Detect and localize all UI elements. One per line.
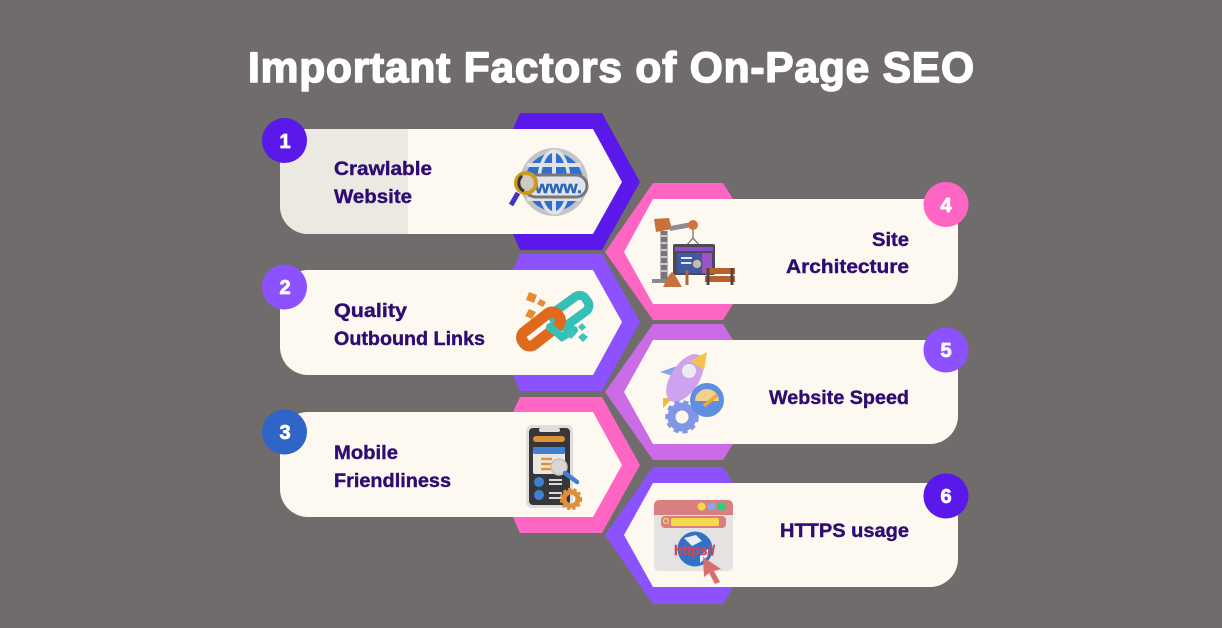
number badge 3: 3 <box>279 422 291 444</box>
label: Mobile Friendliness: Friendliness <box>334 470 451 492</box>
number badge 5: 5 <box>940 340 952 362</box>
panel: 2 Quality Outbound Links <box>262 254 640 391</box>
panel: 1 Crawlable Website <box>262 113 640 250</box>
number badge 1: 1 <box>279 131 291 153</box>
number badge 2: 2 <box>279 277 291 299</box>
label: Quality Outbound Links <box>334 300 485 350</box>
number badge 1 <box>262 118 307 163</box>
title: Important Factors of On-Page SEO <box>248 45 974 92</box>
number badge 6: 6 <box>940 486 952 508</box>
number badge 5 <box>924 328 968 372</box>
label: Crawlable Website: Crawlable <box>334 158 432 180</box>
number badge 3 <box>262 410 307 454</box>
icon: www globe with magnifier: www. <box>534 178 582 197</box>
label: Crawlable Website: Website <box>334 186 412 208</box>
icon: chain link <box>519 292 592 349</box>
icon: browser window with https globe <box>654 500 733 584</box>
label: Crawlable Website <box>334 158 432 208</box>
label: Quality Outbound Links: Quality <box>334 300 407 322</box>
label: Website Speed: Website Speed <box>769 387 909 409</box>
icon: phone with gear <box>526 425 581 509</box>
number badge 4: 4 <box>940 195 952 217</box>
label: HTTPS usage: HTTPS usage <box>780 520 909 542</box>
icon: construction crane and web page <box>652 218 735 287</box>
number badge 6 <box>924 474 968 518</box>
panel: 4 Site Architecture <box>605 182 968 320</box>
panel: 5 Website Speed <box>605 324 968 460</box>
label: Site Architecture: Site <box>872 229 909 251</box>
icon: browser window with https globe: https// <box>674 542 715 558</box>
icon: www globe with magnifier <box>511 148 588 216</box>
number badge 2 <box>262 264 307 310</box>
label: Site Architecture <box>786 229 909 278</box>
label: Quality Outbound Links: Outbound Links <box>334 328 485 350</box>
number badge 4 <box>924 182 968 227</box>
panel: 3 Mobile Friendliness <box>262 397 640 533</box>
label: Mobile Friendliness: Mobile <box>334 442 398 464</box>
panel: 6 HTTPS usage <box>605 467 968 604</box>
icon: rocket with gear and gauge <box>659 348 724 432</box>
label: Mobile Friendliness <box>334 442 451 492</box>
label: Site Architecture: Architecture <box>786 256 909 278</box>
